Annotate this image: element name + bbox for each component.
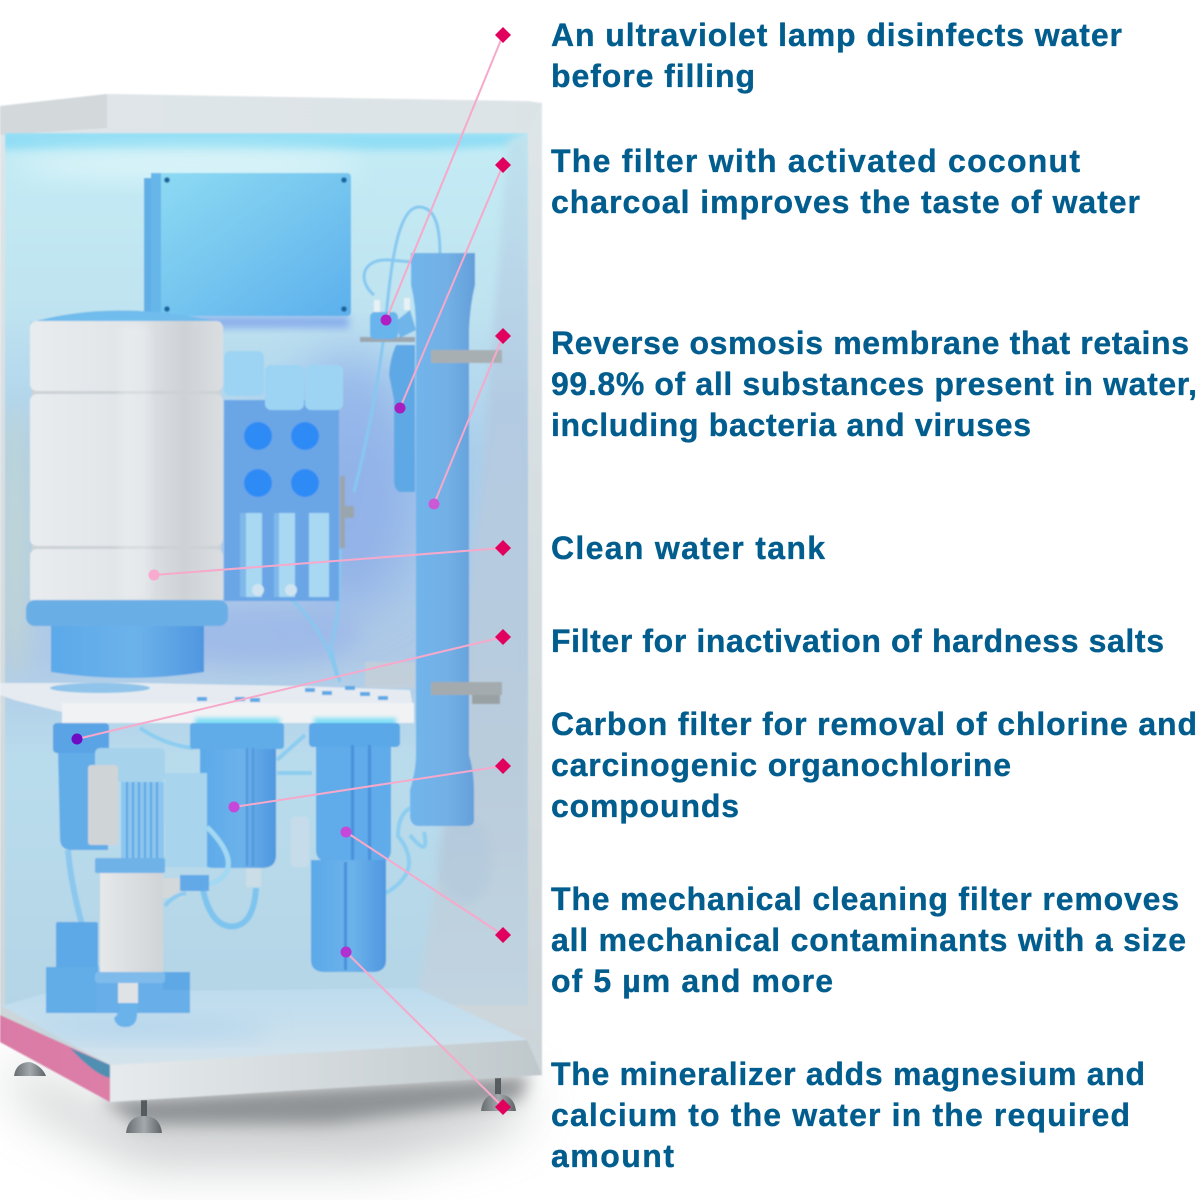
tubes — [291, 207, 440, 682]
feet — [14, 1062, 516, 1133]
cabinet — [0, 94, 542, 1102]
label: mechanical cleaning filter — [551, 881, 1186, 999]
label: mineralizer: amount — [551, 1138, 674, 1174]
marker diamonds — [495, 27, 511, 1115]
floor — [0, 988, 527, 1065]
label: mechanical cleaning filter: The mechanical cleaning filter removes — [551, 881, 1179, 917]
label: ultraviolet lamp: An ultraviolet lamp disinfects water — [551, 17, 1122, 53]
tank base — [51, 622, 204, 678]
flow bars — [240, 513, 329, 597]
label: reverse osmosis membrane — [551, 325, 1197, 443]
shelf — [0, 662, 415, 723]
manifold block — [224, 351, 354, 601]
label: mineralizer: calcium to the water in the required — [551, 1097, 1130, 1133]
clean water tank — [26, 310, 228, 678]
mineralizer filter — [311, 860, 386, 972]
interior lighting — [0, 130, 530, 1042]
tank dome — [29, 310, 224, 323]
pink cut face — [0, 1015, 110, 1102]
pump — [88, 748, 228, 1027]
manifold circles — [244, 422, 319, 497]
label: coconut charcoal filter: The filter with activated coconut — [551, 143, 1080, 179]
back wall — [5, 133, 528, 1005]
label: coconut charcoal filter: charcoal improves the taste of water — [551, 184, 1140, 220]
label: reverse osmosis membrane: Reverse osmosis membrane that retains — [551, 325, 1189, 361]
label: reverse osmosis membrane: 99.8% of all substances present in water, — [551, 366, 1197, 402]
reverse osmosis column — [410, 253, 502, 826]
front lip — [110, 1040, 542, 1102]
solenoid valves — [224, 351, 343, 410]
label: ultraviolet lamp — [551, 17, 1122, 94]
mechanical cleaning filter — [291, 718, 400, 867]
right wall — [417, 133, 530, 1042]
tank body — [32, 322, 221, 602]
uv lamp unit — [360, 298, 416, 342]
left foot — [14, 1062, 46, 1076]
control box — [144, 173, 351, 328]
label: ultraviolet lamp: before filling — [551, 58, 755, 94]
label: hardness salts filter: Filter for inactivation of hardness salts — [551, 623, 1164, 659]
marker dots — [72, 314, 440, 958]
carbon filter — [190, 718, 284, 926]
appliance artwork — [0, 94, 542, 1102]
label: mineralizer — [551, 1056, 1145, 1174]
pump stand — [46, 922, 190, 1013]
front foot — [126, 1100, 162, 1133]
cabinet shell — [0, 94, 542, 1102]
label: carbon filter: compounds — [551, 788, 739, 824]
lower tubes — [140, 728, 425, 893]
leader lines — [77, 35, 503, 1107]
label: carbon filter: Carbon filter for removal of chlorine and — [551, 706, 1197, 742]
label: coconut charcoal filter — [551, 143, 1140, 220]
label: carbon filter: carcinogenic organochlorine — [551, 747, 1011, 783]
fitting — [340, 476, 354, 548]
clamps — [431, 350, 502, 704]
right foot — [481, 1078, 516, 1111]
label: carbon filter — [551, 706, 1197, 824]
hardness salts filter — [53, 723, 125, 1020]
coconut charcoal filter — [389, 345, 415, 492]
floor shadow — [0, 1060, 530, 1165]
label: mineralizer: The mineralizer adds magnesium and — [551, 1056, 1145, 1092]
shelf fittings — [197, 686, 388, 702]
top panel — [107, 94, 542, 134]
label: reverse osmosis membrane: including bacteria and viruses — [551, 407, 1031, 443]
label: clean water tank: Clean water tank — [551, 530, 825, 566]
label: mechanical cleaning filter: all mechanical contaminants with a size — [551, 922, 1186, 958]
label: mechanical cleaning filter: of 5 µm and more — [551, 963, 833, 999]
